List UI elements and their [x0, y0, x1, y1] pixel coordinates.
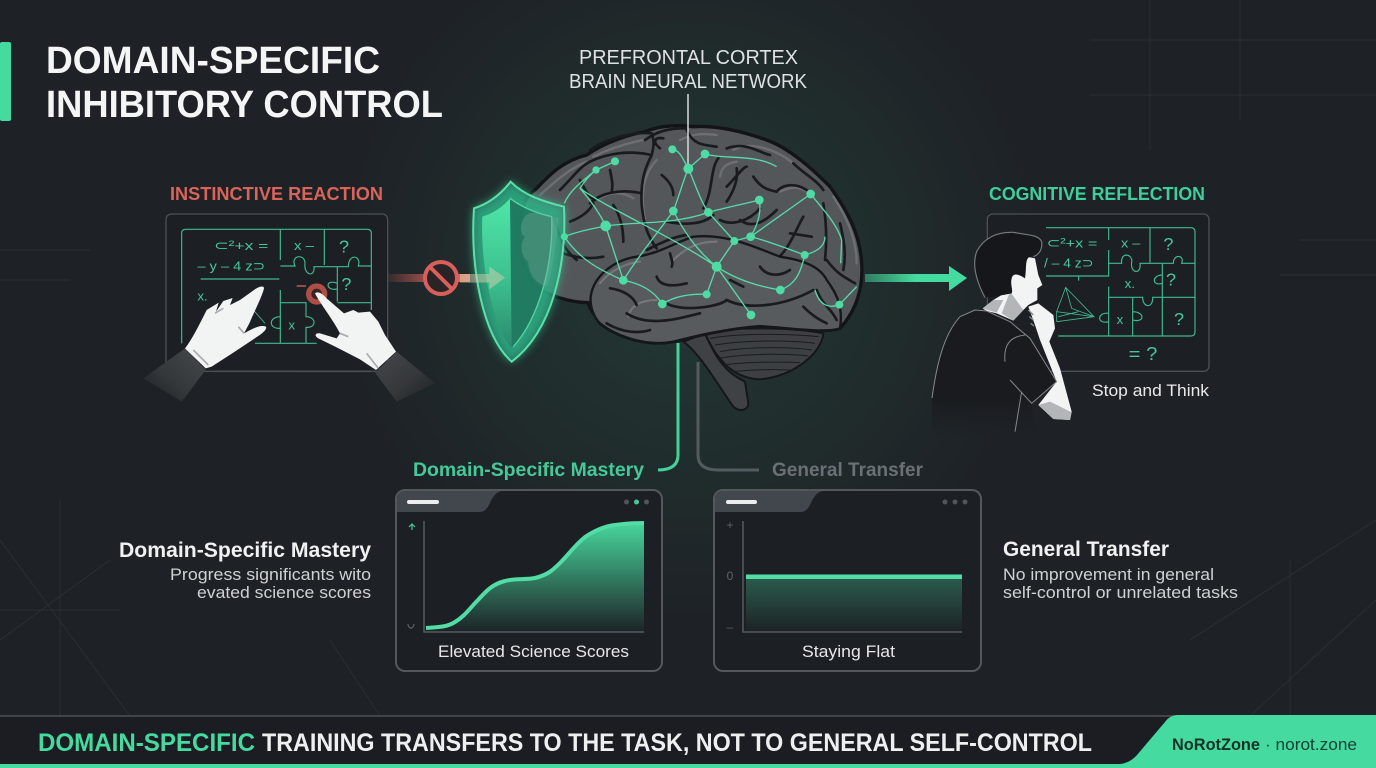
puzzle symbols: x. [1125, 276, 1135, 291]
text block: general transfer: No improvement in general [1003, 566, 1214, 584]
puzzle symbols: ? [341, 274, 351, 294]
text block: general transfer [1003, 538, 1238, 602]
icon: shield [460, 182, 564, 362]
temporal lobe [591, 236, 841, 343]
label: domain-specific mastery: Domain-Specific Mastery [413, 460, 644, 481]
connector: prefrontal label line [687, 94, 689, 170]
panel: staying flat chart: 0 [727, 569, 734, 583]
area curve [426, 523, 644, 632]
puzzle symbols: – y – 4 z⊃ [197, 259, 265, 274]
upper sulci [553, 128, 855, 283]
text block: domain-specific mastery [119, 539, 371, 602]
arrow: to cognitive reflection [865, 266, 967, 291]
illustration: thinking person [932, 232, 1072, 438]
puzzle symbols: x – [294, 238, 315, 253]
panel: staying flat chart: + [726, 518, 734, 532]
puzzle grid [182, 229, 371, 343]
connector: general transfer branch [698, 362, 759, 470]
label: general transfer: General Transfer [772, 460, 924, 481]
footer takeaway: TRAINING TRANSFERS TO THE TASK, NOT TO GENERAL SELF-CONTROL [262, 729, 1092, 757]
puzzle symbols: ? [339, 236, 349, 256]
icon: left hand [143, 287, 266, 402]
text block: general transfer: self-control or unrelated tasks [1003, 584, 1238, 602]
panel: staying flat chart [714, 490, 981, 671]
puzzle symbols [197, 236, 351, 332]
text block: domain-specific mastery: evated science scores [197, 584, 371, 602]
puzzle symbols [1044, 234, 1184, 364]
upper gyri highlights [540, 134, 857, 263]
panel: staying flat chart: – [727, 620, 734, 634]
footer banner [0, 715, 1376, 768]
chart: neural network [561, 145, 857, 319]
panel: cognitive reflection board [987, 214, 1209, 371]
puzzle grid [1046, 228, 1195, 336]
temporal details [600, 242, 837, 332]
connector: domain-specific branch [658, 343, 678, 470]
cerebrum [519, 126, 862, 343]
torso [932, 310, 1057, 438]
panel: elevated science scores chart: Elevated Science Scores [438, 642, 629, 661]
brand badge: · norot.zone [1265, 736, 1357, 754]
puzzle symbols: x – [1121, 235, 1141, 250]
puzzle symbols: ? [1166, 270, 1176, 290]
panel: instinctive reaction tablet [166, 214, 388, 371]
puzzle symbols: x. [197, 289, 208, 304]
text block: general transfer: General Transfer [1003, 538, 1169, 561]
title [46, 40, 443, 126]
title: DOMAIN-SPECIFIC [46, 40, 380, 82]
puzzle symbols: x [1117, 312, 1124, 327]
brain stem [683, 333, 748, 410]
text block: domain-specific mastery: Progress significants wito [170, 566, 371, 584]
panel: elevated science scores chart [396, 490, 662, 671]
heading: instinctive reaction: INSTINCTIVE REACTION [170, 183, 383, 204]
hair [975, 232, 1042, 298]
arrow: blocked reaction [388, 262, 470, 294]
brand badge: NoRotZone [1172, 736, 1260, 754]
puzzle symbols: ? [1163, 234, 1173, 254]
caption: stop and think: Stop and Think [1092, 381, 1210, 400]
puzzle symbols: / – 4 z⊃ [1044, 255, 1093, 270]
panel: staying flat chart: Staying Flat [802, 642, 895, 661]
hand and arm [1028, 303, 1072, 420]
puzzle symbols: ⊂²+x = [1047, 235, 1098, 250]
accent bar [0, 42, 11, 121]
flat line [746, 574, 962, 632]
shirt outlines [932, 310, 1057, 432]
puzzle symbols: = ? [1129, 343, 1157, 364]
neck and face [983, 257, 1042, 321]
brain seen through shield [521, 213, 558, 287]
puzzle symbols: ? [1174, 309, 1184, 329]
brain label: PREFRONTAL CORTEX [579, 47, 798, 69]
cerebellum [705, 328, 823, 379]
brain label [569, 47, 808, 93]
touch point [306, 283, 327, 305]
heading: cognitive reflection: COGNITIVE REFLECTION [989, 183, 1205, 204]
illustration: brain [519, 126, 862, 410]
footer takeaway: DOMAIN-SPECIFIC [38, 729, 255, 757]
icon: right hand [315, 292, 435, 402]
puzzle symbols: ⊂²+x = [214, 238, 269, 253]
text block: domain-specific mastery: Domain-Specific Mastery [119, 539, 371, 562]
brand badge [1120, 715, 1376, 768]
arrow seen through shield [460, 267, 505, 289]
puzzle symbols: x [288, 317, 295, 332]
title: INHIBITORY CONTROL [46, 84, 443, 126]
brain label: BRAIN NEURAL NETWORK [569, 71, 808, 93]
